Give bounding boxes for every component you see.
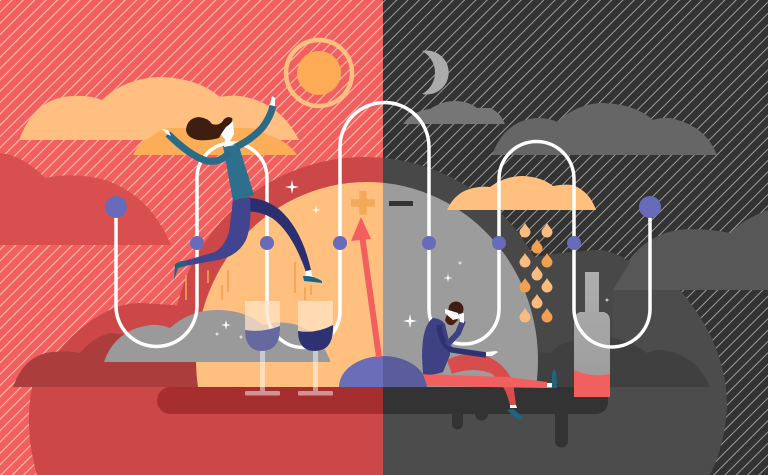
figure: sad man <box>422 302 557 421</box>
motion lines <box>186 262 311 300</box>
front leg <box>184 197 250 266</box>
face <box>445 309 460 320</box>
lower foot <box>510 405 517 408</box>
right arm <box>236 106 273 147</box>
torso <box>223 143 254 201</box>
hand to head <box>459 313 464 323</box>
rain drops <box>520 223 552 322</box>
dome: dark outer <box>383 158 534 270</box>
hands <box>162 96 275 136</box>
panel: night side <box>383 0 768 475</box>
sparkles <box>214 180 610 340</box>
straight foot <box>547 383 552 388</box>
lower red circle <box>29 387 383 475</box>
left arm <box>168 134 229 161</box>
arm to head <box>447 321 463 345</box>
dark hump behind bottle <box>534 250 630 288</box>
straight leg <box>423 374 547 388</box>
counter: minus sign <box>389 201 413 206</box>
dome: red outer <box>177 157 383 310</box>
back foot <box>304 270 322 283</box>
cloud: right grey <box>613 210 768 290</box>
cloud: grey <box>104 310 330 362</box>
cloud: dark red base <box>13 333 210 387</box>
hair <box>448 302 464 316</box>
cloud: large peach <box>19 77 299 140</box>
cloud: big grey <box>492 103 717 155</box>
mood line: white tube <box>116 102 650 348</box>
cloud: small orange <box>133 128 297 155</box>
figure: jumping woman <box>162 96 322 283</box>
bent leg <box>447 354 516 405</box>
hair <box>186 117 232 140</box>
dome: peach inner <box>196 182 383 387</box>
front foot <box>174 261 186 280</box>
mood line nodes <box>105 196 661 250</box>
panel: day side <box>0 0 383 475</box>
lower dark circle <box>383 290 727 475</box>
arm on knee <box>439 325 486 355</box>
body <box>422 318 450 375</box>
head <box>220 120 235 147</box>
arrow: up to plus <box>351 217 379 357</box>
dome: grey inner <box>383 182 538 387</box>
cloud: dark base <box>554 338 710 387</box>
cloud: peach rain cloud <box>447 176 596 210</box>
counter: plus sign <box>351 191 375 215</box>
wine glass: left <box>245 301 280 396</box>
dome gauge base <box>339 356 427 387</box>
hand on knee <box>486 351 498 356</box>
cloud: medium red <box>58 303 178 353</box>
wine glass: right <box>298 301 333 396</box>
cloud: small grey <box>403 101 505 124</box>
icon: crescent moon <box>422 50 449 94</box>
back leg <box>244 198 311 272</box>
cloud: left dark red <box>0 153 171 245</box>
beard <box>445 312 458 325</box>
icon: sun <box>286 40 352 106</box>
table bar <box>157 387 608 448</box>
wine bottle <box>574 272 610 397</box>
